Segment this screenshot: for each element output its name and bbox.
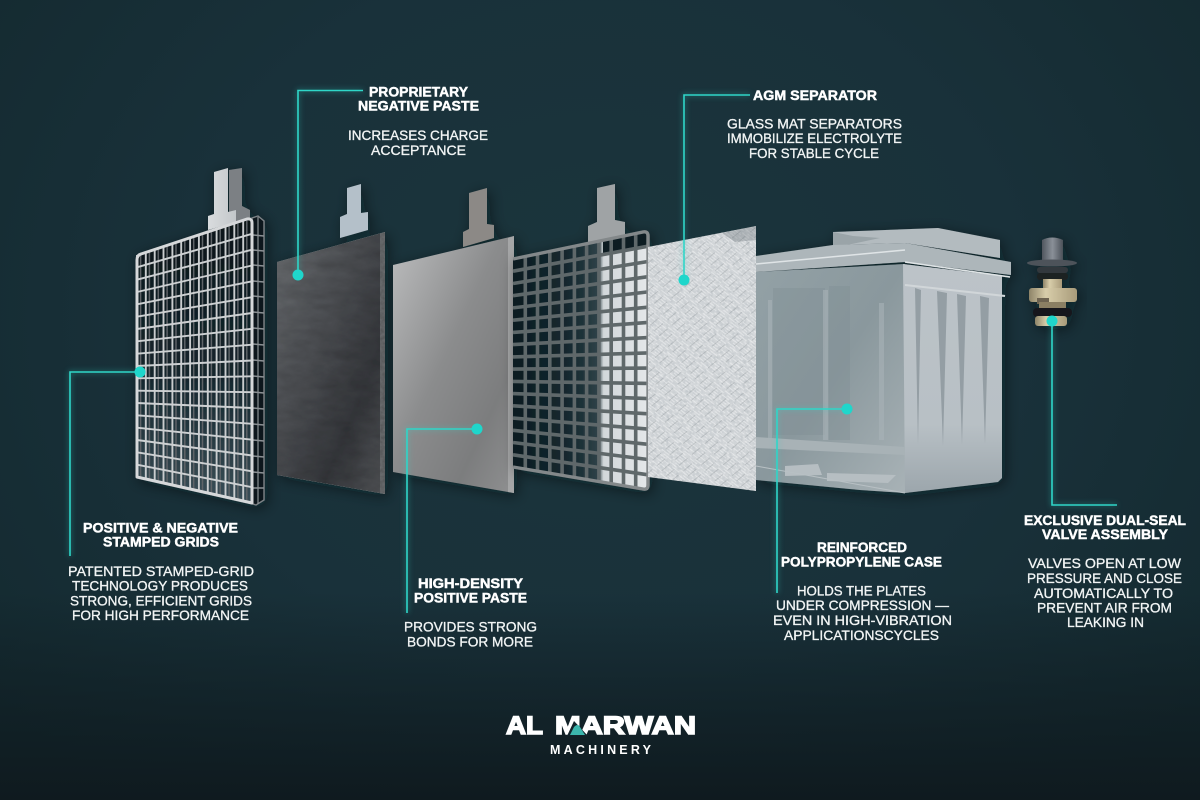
component: positive paste plate [393,188,514,493]
text block: AGM separator: GLASS MAT SEPARATORS [727,116,902,132]
text block: polypropylene case: POLYPROPYLENE CASE [781,554,942,570]
text block: valve assembly: PRESSURE AND CLOSE [1027,570,1182,586]
component: negative paste plate [277,184,385,494]
text block: positive paste: POSITIVE PASTE [414,590,527,606]
text block: polypropylene case: UNDER COMPRESSION — [776,597,949,613]
text block: negative paste: PROPRIETARY [369,84,468,100]
leader: stamped grids [70,366,146,556]
component: AGM glass mat separator [648,226,756,491]
text block: stamped grids: STAMPED GRIDS [103,534,219,550]
text block: valve assembly [1024,513,1186,630]
text block: polypropylene case: APPLICATIONSCYCLES [784,627,939,643]
logo: Al Marwan Machinery: MARWAN [555,712,696,740]
text block: polypropylene case: REINFORCED [817,540,907,555]
text block: stamped grids [68,520,254,623]
text block: positive paste: HIGH-DENSITY [418,576,523,591]
logo: Al Marwan Machinery: AL [506,712,543,740]
text block: valve assembly: LEAKING IN [1067,614,1144,630]
text block: polypropylene case [773,540,952,643]
case lid [756,228,1011,275]
text block: AGM separator: FOR STABLE CYCLE [749,145,879,161]
text block: valve assembly: AUTOMATICALLY TO [1034,585,1173,601]
text block: AGM separator [727,88,902,161]
text block: polypropylene case: HOLDS THE PLATES [797,582,926,598]
text block: stamped grids: POSITIVE & NEGATIVE [83,520,238,536]
component: second stamped grid [513,184,648,490]
leader: AGM separator [678,95,750,286]
text block: valve assembly: VALVE ASSEMBLY [1042,527,1168,542]
text block: stamped grids: STRONG, EFFICIENT GRIDS [70,592,252,608]
text block: positive paste: PROVIDES STRONG [404,618,537,634]
leader: valve assembly [1046,316,1117,505]
case ribs and details [756,250,1010,493]
text block: negative paste: INCREASES CHARGE [348,127,488,143]
text block: valve assembly: EXCLUSIVE DUAL-SEAL [1024,513,1186,528]
leader: positive paste [407,424,482,613]
text block: AGM separator: AGM SEPARATOR [753,88,877,103]
case left face [756,264,905,493]
text block: positive paste [404,576,537,650]
text block: negative paste: NEGATIVE PASTE [358,98,479,114]
text block: valve assembly: PREVENT AIR FROM [1037,600,1172,616]
case right face [903,264,1002,493]
text block: valve assembly: VALVES OPEN AT LOW [1028,555,1182,571]
text block: AGM separator: IMMOBILIZE ELECTROLYTE [727,130,902,146]
leader: polypropylene case [777,404,852,593]
logo: Al Marwan Machinery: MACHINERY [550,743,652,757]
component: positive and negative stamped grid [137,168,264,505]
text block: positive paste: BONDS FOR MORE [407,634,533,650]
component: reinforced polypropylene case [756,228,1011,493]
text block: stamped grids: PATENTED STAMPED-GRID [68,563,254,579]
leader: negative paste [292,90,363,280]
text block: negative paste: ACCEPTANCE [371,142,466,158]
component: dual-seal valve assembly [1027,238,1077,326]
text block: negative paste [348,84,488,158]
logo: Al Marwan Machinery [506,712,696,757]
text block: polypropylene case: EVEN IN HIGH-VIBRATION [773,612,952,628]
text block: stamped grids: TECHNOLOGY PRODUCES [72,578,248,594]
text block: stamped grids: FOR HIGH PERFORMANCE [72,607,249,623]
